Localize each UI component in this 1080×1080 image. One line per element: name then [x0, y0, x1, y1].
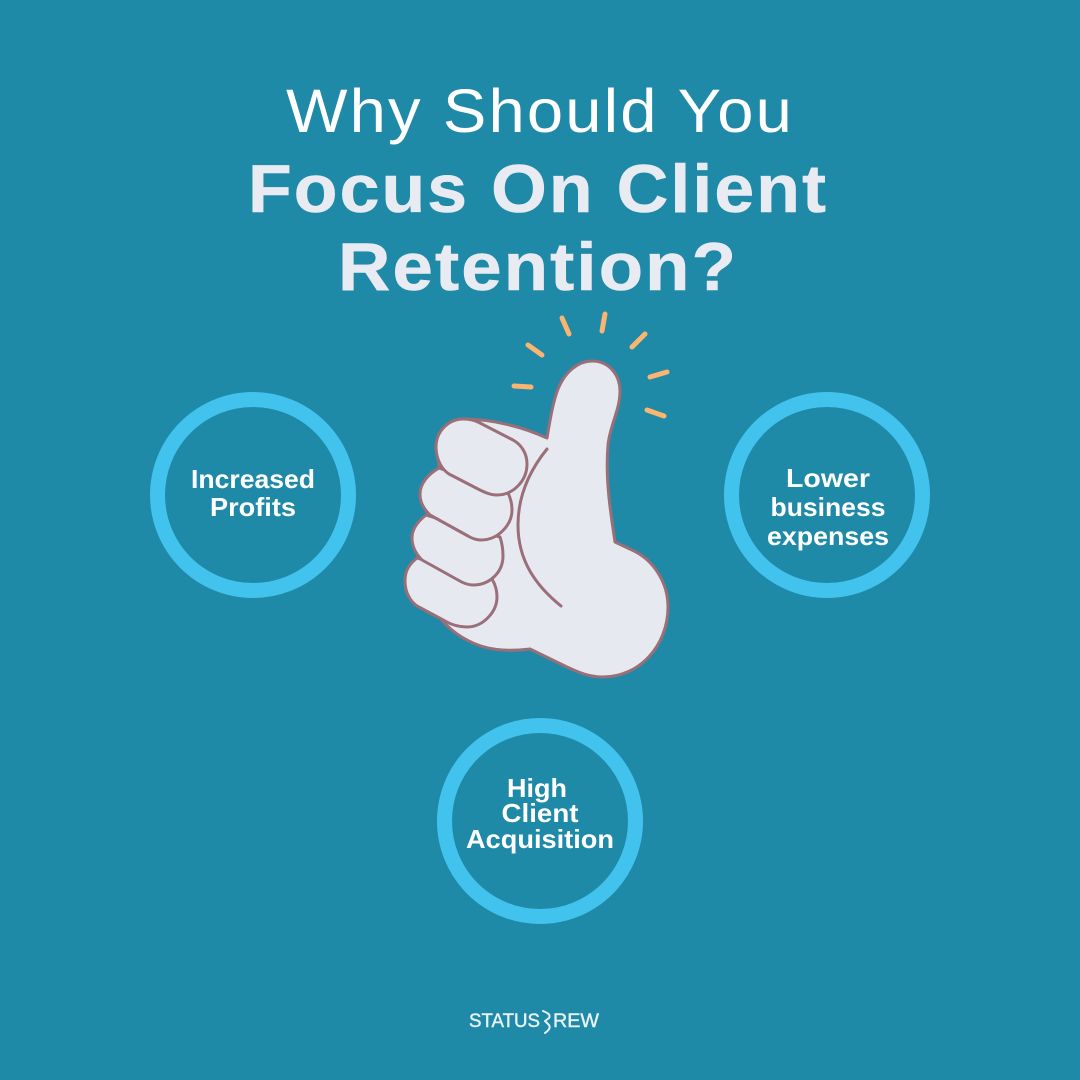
palm crease: [518, 449, 561, 606]
title: Retention?: [338, 229, 738, 305]
finger: middle: [420, 468, 512, 540]
logo: Statusbrew: STATUS: [469, 1011, 540, 1032]
icon: thumbs up hand: [405, 361, 668, 677]
hand outline: [436, 361, 668, 677]
logo: Statusbrew: REW: [553, 1011, 599, 1032]
callout: High Client Acquisition: Client: [502, 798, 579, 828]
finger: little: [405, 558, 497, 627]
callout: Lower business expenses: Lower: [786, 463, 870, 493]
callout: Increased Profits: [158, 400, 348, 590]
callout: Increased Profits: Increased: [191, 464, 315, 494]
logo: Statusbrew: [469, 1011, 599, 1033]
title: [248, 77, 828, 305]
callout: Lower business expenses: [732, 400, 922, 590]
callout: High Client Acquisition: High: [507, 773, 567, 803]
icon: sparkle rays: [514, 314, 667, 416]
callout: Lower business expenses: business: [770, 492, 886, 522]
finger: index: [436, 419, 527, 495]
finger: ring: [412, 515, 503, 585]
callout: Increased Profits: Profits: [210, 492, 296, 522]
callout: Lower business expenses: expenses: [767, 521, 889, 551]
callout: High Client Acquisition: [444, 726, 636, 916]
title: Focus On Client: [248, 151, 828, 227]
title: Why Should You: [286, 77, 794, 145]
callout: High Client Acquisition: Acquisition: [466, 824, 614, 854]
